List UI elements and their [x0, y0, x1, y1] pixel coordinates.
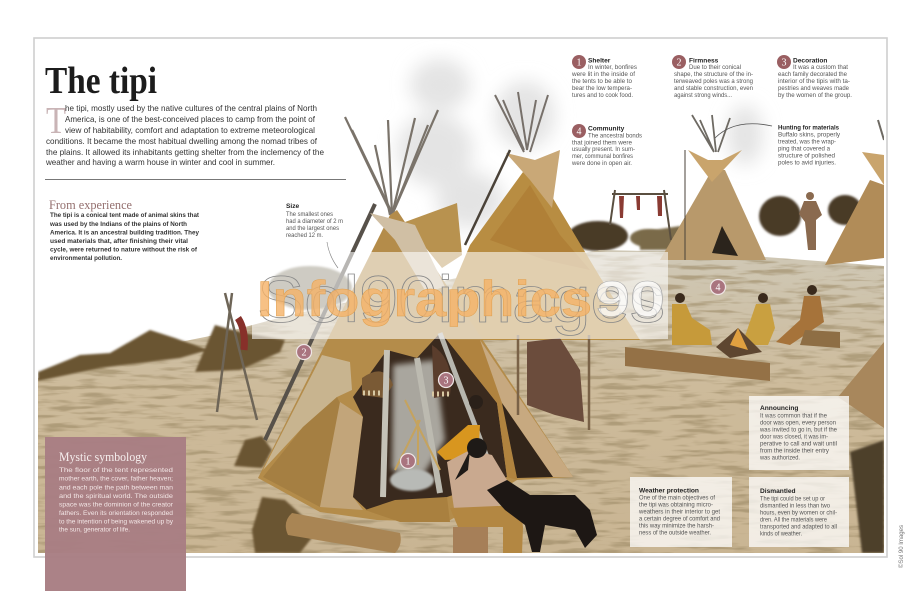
size note: and the largest ones	[286, 225, 340, 232]
birch poles and fire	[383, 333, 487, 497]
long leaning pole	[265, 204, 375, 440]
from experience block: used materials that, after finishing their vital	[50, 238, 188, 245]
tipi door and interior	[353, 333, 573, 510]
note: announcing: from the inside their entry	[760, 448, 830, 454]
note 3 decoration: by the women of the group.	[778, 92, 852, 99]
note: announcing: door was closed, it was im-	[760, 434, 828, 440]
from experience block: America. It is an ancestral building tradition. They	[50, 230, 199, 236]
note 1 shelter	[571, 55, 638, 99]
badge 3	[438, 372, 454, 388]
size note: The smallest ones	[286, 211, 334, 218]
note 2 firmness: Due to their conical	[689, 64, 741, 71]
note 3 decoration: pestries and weaves made	[778, 85, 849, 92]
note 3 decoration: It was a custom that	[793, 64, 848, 71]
badge 2	[296, 344, 312, 360]
standing figure	[799, 192, 822, 250]
intro text: the plains. It allowed its inhabitants getting shelter from the inclemency of the	[46, 147, 324, 157]
size note	[286, 203, 343, 239]
note: weather protection	[630, 477, 732, 547]
note: announcing	[749, 396, 849, 470]
note: hunting for materials: Buffalo skins, properly	[778, 132, 841, 138]
badge 1: 1	[406, 456, 410, 468]
note 2 firmness: and stable construction, even	[674, 85, 753, 92]
note 4 community: mer, communal bonfires	[572, 153, 634, 160]
note 2 firmness: shape, the structure of the in-	[674, 71, 753, 78]
panel: mystic symbology: mother earth, the cover, father heaven;	[59, 476, 173, 483]
note 1 shelter: bear the low tempera-	[572, 85, 632, 92]
badge 4: 4	[716, 282, 720, 294]
note 4 community: 4	[576, 126, 582, 138]
note: weather protection: Weather protection	[639, 488, 699, 494]
panel: mystic symbology: the sun, generator of life.	[59, 526, 130, 534]
note 1 shelter: were lit in the inside of	[571, 71, 635, 78]
note: hunting for materials: treated, was the wrap-	[778, 138, 836, 146]
from experience block: cycle, were returned to nature without the risk of	[50, 246, 198, 254]
background bushes	[268, 195, 862, 310]
watermark band	[252, 252, 668, 339]
note 2 firmness: 2	[676, 58, 682, 68]
seated man with stump	[447, 438, 523, 553]
from experience block	[49, 197, 200, 262]
size note: had a diameter of 2 m	[286, 218, 343, 225]
smoke in the sky	[394, 56, 767, 232]
intro text	[45, 103, 324, 167]
panel: mystic symbology: and each pole the path between man	[59, 484, 173, 491]
main tipi cover	[258, 203, 573, 522]
note 4 community: that joined them were	[572, 140, 632, 146]
badge 1	[400, 454, 416, 468]
badge 4	[710, 280, 726, 294]
note: dismantled: transported and adapted to all	[760, 524, 837, 530]
illustration: tipi camp scene	[38, 59, 884, 553]
note 3 decoration: interior of the tipis with ta-	[778, 78, 850, 85]
meat drying rack	[610, 190, 671, 240]
note: dismantled: Dismantled	[760, 488, 796, 495]
note 1 shelter: In winter, bonfires	[588, 64, 638, 71]
campfire group	[625, 285, 840, 381]
back tipi	[452, 92, 640, 340]
note: weather protection: this way minimize the harsh-	[639, 522, 714, 530]
note: announcing: was invited to go in, but if the	[759, 426, 837, 434]
watermark text: 90	[595, 271, 665, 327]
note 4 community: were done in open air.	[571, 160, 632, 167]
log in foreground	[286, 513, 401, 553]
watermark text: Infographics	[257, 271, 592, 327]
intro text: view of habitability, comfort and adaptation to extreme meteorological	[65, 125, 315, 135]
note: dismantled: The tipi could be set up or	[760, 496, 826, 502]
panel: mystic symbology: space was the dominion of the creator	[59, 502, 174, 509]
panel: mystic symbology: fathers. Even its orientation responded	[59, 510, 173, 517]
note 3 decoration	[777, 55, 852, 99]
panel: mystic symbology: Mystic symbology	[59, 449, 147, 464]
panel: mystic symbology	[45, 437, 186, 591]
drying hide on frame	[518, 335, 589, 430]
from experience block: From experience	[49, 197, 132, 212]
from experience block: was used by the Indians of the plains of North	[49, 221, 187, 228]
panel: mystic symbology: to the intention of being wakened up by	[59, 518, 174, 526]
grass tufts	[38, 226, 884, 553]
badge 3: 3	[444, 376, 448, 386]
panel: mystic symbology: and the spiritual world. The outside	[59, 493, 173, 500]
note: announcing: Announcing	[760, 405, 798, 412]
intro text: America, is one of the best-conceived places to camp from the point of	[65, 114, 316, 124]
intro text: weather and having a warm house in winter and cool in summer.	[45, 157, 275, 167]
note: hunting for materials: ping that covered a	[778, 146, 830, 152]
note: dismantled: kinds of weather.	[760, 530, 802, 538]
note: dismantled	[749, 477, 849, 547]
note: hunting for materials	[778, 124, 841, 166]
note: weather protection: weathers in their interior to get	[638, 508, 720, 516]
note: dismantled: dismantled in less than two	[760, 502, 830, 510]
front flap	[365, 497, 450, 522]
drop cap: T	[46, 100, 66, 142]
note: announcing: perative to call and wait until	[760, 440, 837, 448]
note 3 decoration: Decoration	[793, 58, 827, 64]
from experience block: environmental pollution.	[50, 255, 122, 262]
note 2 firmness: terweaved poles was a strong	[674, 78, 753, 85]
note: dismantled: dren. All the materials were	[760, 516, 827, 524]
main tipi poles	[345, 110, 438, 215]
leader line: hunting	[715, 124, 772, 138]
note 4 community: Community	[588, 126, 625, 132]
note: announcing: was authorized.	[759, 454, 800, 462]
left tripod rack	[217, 293, 257, 420]
note: hunting for materials: structure of polished	[778, 152, 835, 160]
note 2 firmness: against strong winds...	[674, 92, 732, 99]
note: dismantled: hours, even by women or chil-	[760, 510, 837, 516]
note 1 shelter: Shelter	[588, 58, 611, 64]
note: announcing: It was common that if the	[760, 412, 827, 420]
image credit: ©Sol 90 Images	[897, 524, 905, 568]
right foreground tipi	[838, 342, 884, 428]
note 1 shelter: the tents to be able to	[572, 78, 632, 85]
note 4 community: The ancestral bonds	[588, 132, 643, 140]
note: hunting for materials: Hunting for materials	[778, 124, 839, 132]
note 1 shelter: 1	[576, 58, 582, 68]
title: The tipi	[45, 60, 157, 102]
note 2 firmness	[672, 55, 753, 99]
note: weather protection: a certain degree of comfort and	[639, 516, 720, 522]
note: announcing: door was open, every person	[760, 420, 836, 426]
note: weather protection: One of the main objectives of	[639, 494, 715, 502]
note 3 decoration: 3	[782, 58, 786, 68]
size note: Size	[286, 203, 300, 210]
far right tipi	[825, 120, 884, 265]
note 4 community	[571, 124, 643, 167]
woman inside the tipi	[437, 395, 483, 460]
black dog	[487, 480, 597, 552]
note: hunting for materials: poles to avid injuries.	[778, 160, 836, 166]
leader line: size	[327, 242, 338, 268]
intro text: conditions. It became the most habitual dwelling among the nomad tribes of	[46, 136, 318, 146]
note: weather protection: ness of the outside weather.	[639, 530, 711, 536]
panel: mystic symbology: The floor of the tent represented	[59, 467, 173, 474]
note: weather protection: the tipi was obtaining micro-	[639, 502, 713, 508]
size note: reached 12 m.	[286, 232, 323, 239]
note 1 shelter: tures and to cook food.	[572, 92, 633, 99]
right tipi	[660, 115, 766, 260]
watermark text: Sol90images	[257, 262, 665, 336]
badge 2: 2	[302, 348, 306, 358]
note 3 decoration: each family decorated the	[778, 71, 847, 78]
ground	[38, 250, 884, 553]
note 2 firmness: Firmness	[689, 58, 719, 64]
from experience block: The tipi is a conical tent made of animal skins that	[50, 212, 200, 219]
intro text: he tipi, mostly used by the native cultures of the central plains of North	[65, 103, 317, 113]
note 4 community: usually present. In sum-	[572, 146, 635, 153]
